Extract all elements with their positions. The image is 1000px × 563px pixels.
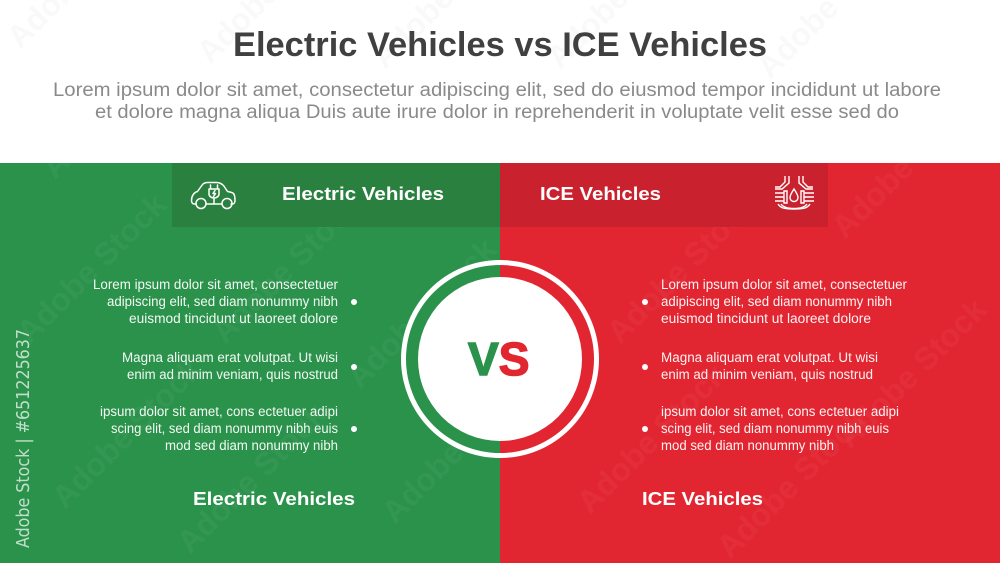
bullet group 3: mod sed diam nonummy nibh bbox=[165, 438, 338, 453]
bullet group 3: scing elit, sed diam nonummy nibh euis bbox=[111, 421, 338, 436]
bullet group 2 bbox=[642, 350, 878, 382]
stock id watermark: Adobe Stock | #651225637 bbox=[13, 329, 34, 548]
vs label: VS bbox=[468, 333, 529, 385]
bullet group 2: Magna aliquam erat volutpat. Ut wisi bbox=[122, 350, 338, 365]
bullet group 1: Lorem ipsum dolor sit amet, consectetuer bbox=[93, 277, 338, 292]
bottom label: ICE vehicles: ICE Vehicles bbox=[642, 488, 763, 509]
watermarks: Adobe Stock bbox=[569, 356, 733, 520]
panel: electric vehicles background bbox=[0, 163, 500, 563]
header label: Electric Vehicles bbox=[282, 183, 444, 204]
title: Electric Vehicles vs ICE Vehicles bbox=[233, 26, 767, 64]
header: electric vehicles bbox=[172, 163, 500, 227]
bullet group 1: euismod tincidunt ut laoreet dolore bbox=[129, 311, 338, 326]
subtitle: et dolore magna aliqua Duis aute irure dolor in reprehenderit in voluptate velit esse sed do bbox=[95, 102, 899, 123]
bullet group 2 bbox=[122, 350, 357, 382]
bullet group 1: Lorem ipsum dolor sit amet, consectetuer bbox=[661, 277, 907, 292]
subtitle bbox=[53, 80, 941, 123]
bullet group 3: ipsum dolor sit amet, cons ectetuer adipi bbox=[100, 404, 338, 419]
watermarks: Adobe Stock bbox=[709, 401, 873, 563]
bullet group 3 bbox=[642, 404, 899, 453]
watermarks: Adobe Stock bbox=[369, 26, 533, 190]
watermarks: Adobe Stock bbox=[169, 396, 333, 560]
bullet group 3: scing elit, sed diam nonummy nibh euis bbox=[661, 421, 889, 436]
bullet group 1: adipiscing elit, sed diam nonummy nibh bbox=[661, 294, 892, 309]
watermarks: Adobe Stock bbox=[549, 26, 713, 190]
watermarks: Adobe Stock bbox=[44, 351, 208, 515]
panel: ICE vehicles background bbox=[500, 163, 1000, 563]
bullet group 1 bbox=[642, 277, 907, 326]
header: ICE vehicles bbox=[500, 163, 828, 227]
bullet group 2: enim ad minim veniam, quis nostrud bbox=[127, 367, 338, 382]
watermarks: Adobe Stock bbox=[824, 81, 988, 245]
bullet group 1: adipiscing elit, sed diam nonummy nibh bbox=[107, 294, 338, 309]
vs circle bbox=[401, 260, 599, 458]
watermarks: Adobe Stock bbox=[374, 366, 538, 530]
bullet group 3 bbox=[100, 404, 357, 453]
watermarks: Adobe Stock bbox=[219, 21, 383, 185]
watermarks: Adobe Stock bbox=[339, 231, 503, 395]
watermarks: Adobe Stock bbox=[599, 186, 763, 350]
bottom label: electric vehicles: Electric Vehicles bbox=[193, 488, 355, 509]
watermarks: Adobe Stock bbox=[9, 186, 173, 350]
bullet group 3: mod sed diam nonummy nibh bbox=[661, 438, 834, 453]
icon: engine oil drop bbox=[775, 176, 814, 209]
watermarks: Adobe Stock bbox=[769, 21, 933, 185]
watermarks: Adobe Stock bbox=[204, 186, 368, 350]
watermarks: Adobe Stock bbox=[829, 291, 993, 455]
bullet group 3: ipsum dolor sit amet, cons ectetuer adipi bbox=[661, 404, 899, 419]
bullet group 2: enim ad minim veniam, quis nostrud bbox=[661, 367, 873, 382]
header label: ICE Vehicles bbox=[540, 183, 661, 204]
bullet group 1 bbox=[93, 277, 357, 326]
left bullet list bbox=[93, 277, 357, 453]
bullet group 1: euismod tincidunt ut laoreet dolore bbox=[661, 311, 871, 326]
watermarks: Adobe Stock bbox=[34, 21, 198, 185]
subtitle: Lorem ipsum dolor sit amet, consectetur adipiscing elit, sed do eiusmod tempor incididunt ut labore bbox=[53, 80, 941, 101]
icon: electric car with plug bbox=[192, 182, 235, 208]
right bullet list bbox=[642, 277, 907, 453]
bullet group 2: Magna aliquam erat volutpat. Ut wisi bbox=[661, 350, 878, 365]
